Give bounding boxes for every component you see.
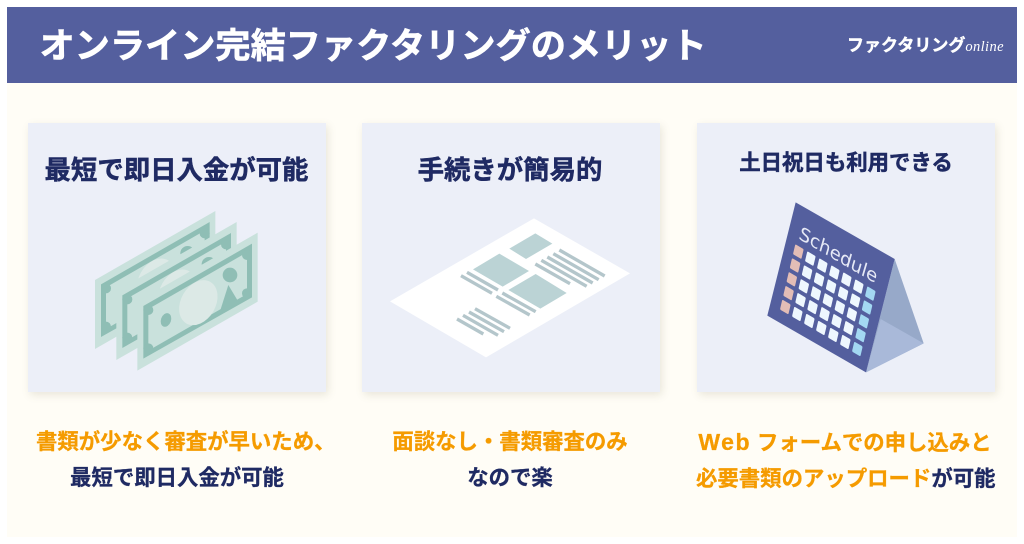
heading: simple procedure: 手続きが簡易的 [418,155,602,185]
panel: same-day funding [28,123,326,392]
brand logo: ファクタリングonline [847,36,1004,55]
caption: weekends and holidays: Web フォームでの申し込みと [698,429,992,455]
caption: weekends and holidays [696,429,996,491]
caption: simple procedure: 面談なし・書類審査のみ [392,430,628,454]
caption: simple procedure: なので楽 [467,466,553,490]
title: オンライン完結ファクタリングのメリット [40,27,707,66]
caption: same-day funding: 最短で即日入金が可能 [70,466,284,490]
caption: same-day funding: 書類が少なく審査が早いため、 [36,430,335,454]
header band [7,7,1017,83]
panel: weekends and holidays [697,123,995,392]
icon: document [390,218,630,357]
calendar label: Schedule [797,223,880,288]
icon: banknotes [95,211,258,371]
caption: same-day funding [36,430,335,490]
icon: desk calendar [767,202,924,372]
panel: simple procedure [362,123,660,392]
date grid [780,244,876,356]
caption: weekends and holidays: 必要書類のアップロードが可能 [696,467,996,491]
caption: simple procedure [392,430,628,490]
heading: same-day funding: 最短で即日入金が可能 [45,155,308,185]
heading: weekends and holidays: 土日祝日も利用できる [739,151,953,175]
